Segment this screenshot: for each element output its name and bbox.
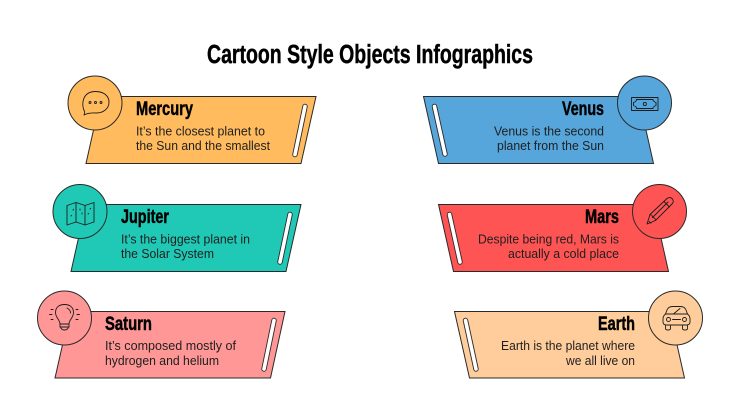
Mars heading: Mars <box>585 207 619 228</box>
Jupiter heading: Jupiter <box>121 207 169 228</box>
Venus slot <box>434 106 445 154</box>
icon: car <box>663 306 690 330</box>
Saturn slot <box>264 320 274 369</box>
Mercury card <box>86 96 316 164</box>
icon: banknote <box>632 98 658 110</box>
Earth slot <box>466 320 476 369</box>
Saturn heading: Saturn <box>105 314 152 335</box>
panel: Mars <box>438 184 686 272</box>
Earth description <box>501 339 635 368</box>
Jupiter description: It’s the biggest planet in <box>121 232 250 246</box>
panel: Saturn <box>38 291 285 378</box>
Earth description: Earth is the planet where <box>501 339 635 353</box>
Mercury slot <box>295 106 305 154</box>
Saturn description: It’s composed mostly of <box>105 339 237 353</box>
icon: speech bubble <box>83 92 109 115</box>
Mars icon circle <box>632 184 686 238</box>
panel: Earth <box>454 291 702 378</box>
Jupiter icon circle <box>53 184 107 238</box>
Jupiter card <box>71 204 301 272</box>
Mars description <box>478 232 619 261</box>
icon: light bulb <box>50 304 80 330</box>
Venus icon circle <box>618 76 672 130</box>
title: Cartoon Style Objects Infographics <box>207 41 533 69</box>
Mars slot <box>450 214 460 262</box>
Saturn icon circle <box>38 291 92 345</box>
Jupiter description <box>121 232 250 261</box>
Saturn card <box>55 312 285 378</box>
Venus description: planet from the Sun <box>497 139 604 153</box>
Venus card <box>424 96 654 164</box>
Saturn description: hydrogen and helium <box>105 354 219 368</box>
Mars card <box>438 204 668 272</box>
Mercury description: the Sun and the smallest <box>136 139 271 153</box>
panel: Jupiter <box>53 184 301 272</box>
Earth icon circle <box>648 291 702 345</box>
Saturn description <box>105 339 237 368</box>
panel: Venus <box>424 76 672 164</box>
Earth card <box>454 312 684 378</box>
icon: pencil <box>647 198 673 224</box>
Jupiter description: the Solar System <box>121 247 214 261</box>
panel: Mercury <box>68 76 316 164</box>
Earth description: we all live on <box>565 354 635 368</box>
Venus description <box>494 124 604 153</box>
Venus heading: Venus <box>562 99 604 120</box>
Mercury heading: Mercury <box>136 99 193 120</box>
Earth heading: Earth <box>598 314 635 335</box>
Jupiter slot <box>280 214 290 262</box>
Mercury description <box>136 124 271 153</box>
Mars description: actually a cold place <box>508 247 619 261</box>
Venus description: Venus is the second <box>494 124 604 138</box>
Mercury description: It’s the closest planet to <box>136 124 265 138</box>
icon: map <box>67 202 94 225</box>
Mercury icon circle <box>68 76 122 130</box>
Mars description: Despite being red, Mars is <box>478 232 619 246</box>
